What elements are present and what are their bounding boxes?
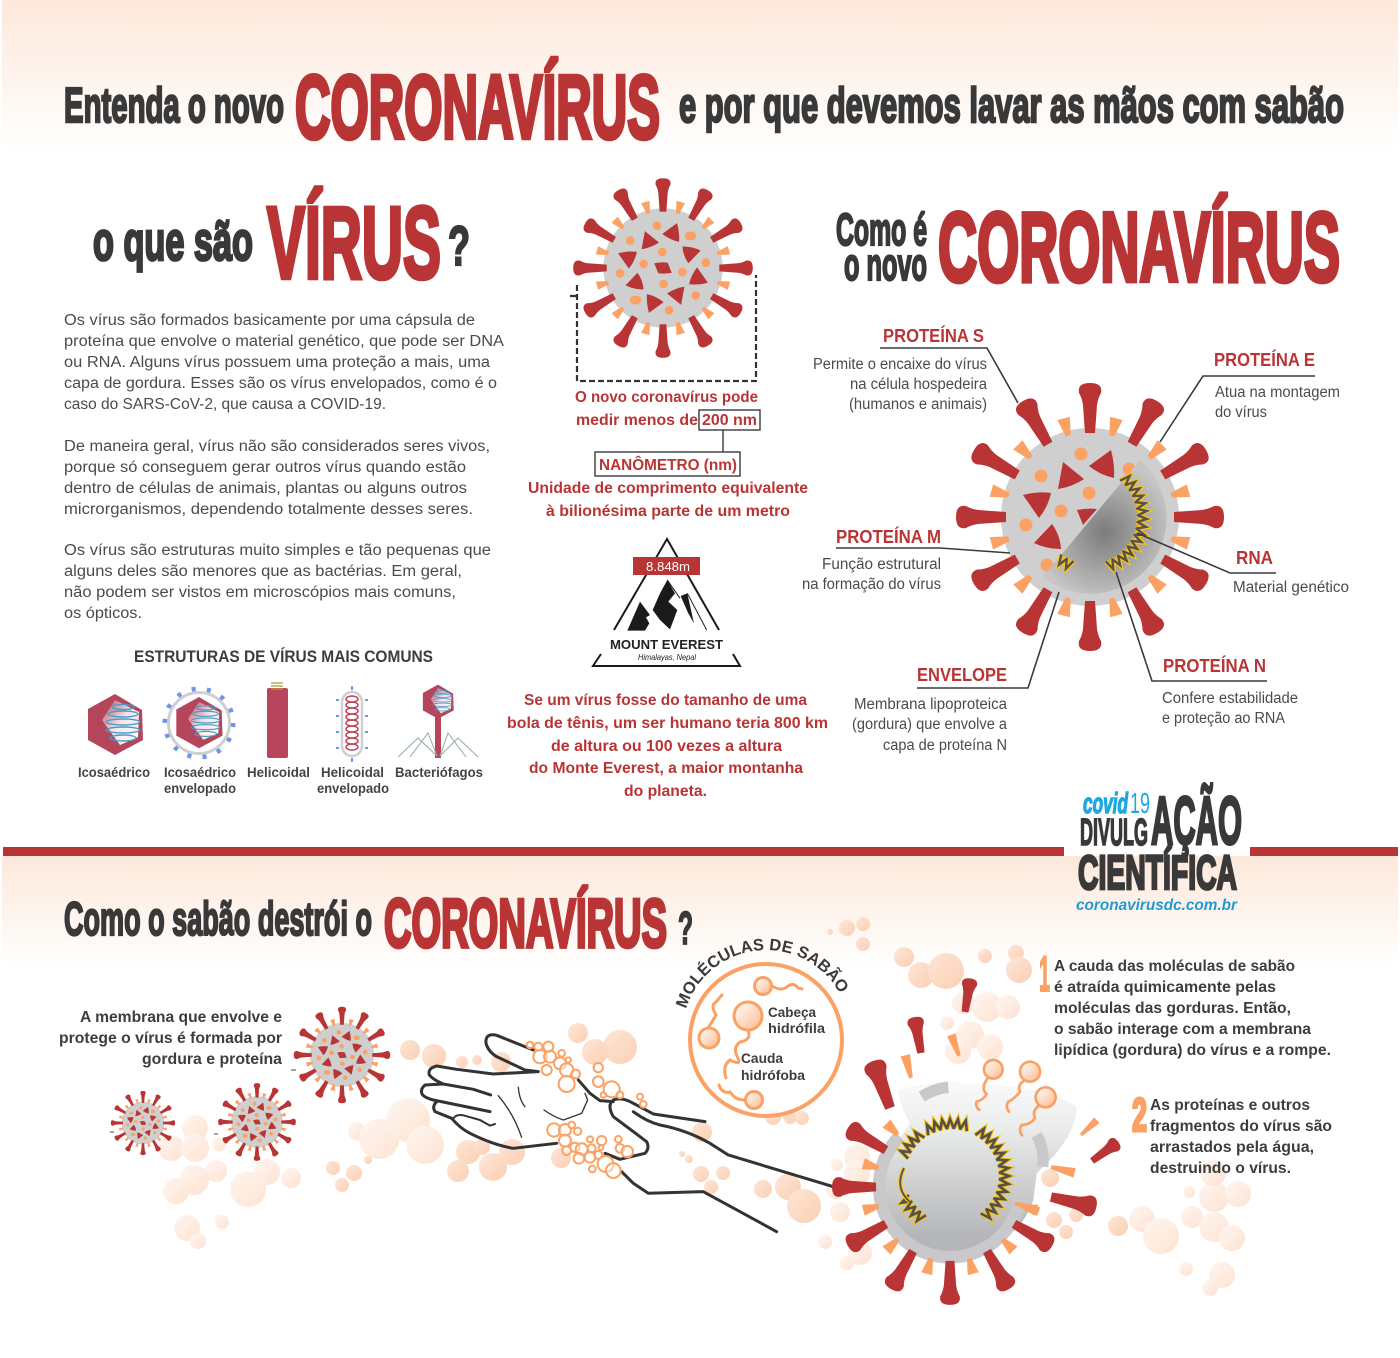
illustration: coronavirus cross section (956, 383, 1224, 651)
dashed scale box (570, 275, 756, 381)
soap foam on wrist (527, 1042, 647, 1178)
icon: bacteriophage (398, 685, 478, 758)
labels: structure names: Icosaédrico (164, 765, 236, 780)
text block: o que são vírus: capa de gordura. Esses são os vírus envelopados, como é o (64, 375, 497, 392)
heading: como o sabão destrói o coronavírus: ? (678, 902, 693, 954)
step 2: destruindo o vírus. (1150, 1160, 1291, 1177)
text: tennis ball comparison: Se um vírus fosse do tamanho de uma (524, 692, 807, 709)
callout: Proteína N: e proteção ao RNA (1162, 710, 1286, 727)
diagram: soap molecules (676, 938, 848, 1118)
text: membrane: A membrana que envolve e (80, 1009, 282, 1026)
labels: structure names: Helicoidal (247, 765, 310, 780)
panel: virus structures (78, 683, 483, 796)
soap bubbles background (158, 917, 1251, 1296)
text: size of the virus: NANÔMETRO (nm) (599, 456, 737, 474)
RNA strands (899, 1119, 1009, 1223)
diagram: soap molecules: hidrófila (768, 1020, 825, 1036)
text: size of the virus (528, 389, 808, 520)
diagram: soap molecules: hidrófoba (741, 1067, 805, 1083)
heading: como o sabão destrói o coronavírus: Como o sabão destrói o (64, 892, 372, 945)
attached spikes (832, 1119, 1057, 1305)
text: tennis ball comparison: de altura ou 100 vezes a altura (551, 738, 782, 755)
labels: structure names: envelopado (317, 781, 389, 796)
text: size of the virus: à bilionésima parte de um metro (546, 503, 790, 520)
text: size of the virus: medir menos de (576, 412, 698, 429)
diagram: coronavirus anatomy (802, 325, 1349, 754)
heading: como o sabão destrói o coronavírus: CORONAVÍRUS (384, 885, 667, 962)
logo: Covid19 Divulgação Científica: 19 (1130, 788, 1150, 820)
heading: estruturas de vírus: ESTRUTURAS DE VÍRUS MAIS COMUNS (134, 647, 433, 666)
callout: Proteína N: PROTEÍNA N (1163, 655, 1266, 676)
step 1: A cauda das moléculas de sabão (1054, 958, 1295, 975)
virus body fading (879, 1082, 1077, 1257)
text block: o que são vírus: proteína que envolve o material genético, que pode ser DNA (64, 333, 505, 350)
main title: CORONAVÍRUS (295, 57, 660, 158)
illustration: washing hands (421, 1035, 833, 1232)
callout: Proteína E: PROTEÍNA E (1214, 349, 1315, 370)
callout: Proteína E: do vírus (1215, 404, 1267, 421)
step 1: lipídica (gordura) do vírus e a rompe. (1054, 1042, 1331, 1059)
callout: Envelope: Membrana lipoproteica (854, 696, 1007, 713)
callout: Envelope: capa de proteína N (883, 737, 1007, 754)
soap molecules on virus (976, 1060, 1056, 1135)
callout: Proteína E (1160, 349, 1340, 442)
callout: Proteína N (1116, 572, 1298, 727)
icon: Mount Everest: 8.848m (646, 559, 690, 574)
icon: Mount Everest (593, 539, 740, 666)
icon: helical virus (267, 683, 288, 758)
labels: structure names: envelopado (164, 781, 236, 796)
text: size of the virus: 200 nm (702, 412, 757, 429)
detached spikes (862, 977, 1123, 1218)
text: membrane: protege o vírus é formada por (59, 1030, 282, 1047)
labels: structure names (78, 765, 483, 796)
callout: Proteína S: na célula hospedeira (850, 376, 987, 393)
icon: Mount Everest: Himalayas, Nepal (638, 652, 697, 662)
logo: Covid19 Divulgação Científica (1076, 783, 1242, 914)
text: size of the virus: O novo coronavírus pode (575, 389, 758, 406)
callout: Proteína S: PROTEÍNA S (883, 325, 984, 346)
text block: o que são vírus: alguns deles são menores que as bactérias. Em geral, (64, 563, 462, 580)
heading: o que são vírus: o que são (93, 210, 253, 272)
step 1: moléculas das gorduras. Então, (1054, 1000, 1291, 1017)
step 1: 1 (1039, 946, 1050, 1002)
step 1: é atraída quimicamente pelas (1054, 979, 1276, 996)
icon: Mount Everest: MOUNT EVEREST (610, 637, 723, 652)
callout: Proteína N: Confere estabilidade (1162, 690, 1298, 707)
icon: enveloped helical virus (336, 686, 368, 762)
step 1 (1039, 946, 1331, 1059)
callout: Envelope (852, 592, 1059, 754)
main title (64, 57, 1344, 158)
heading: como é o novo coronavírus: o novo (844, 239, 927, 290)
text block: o que são vírus: porque só conseguem gerar outros vírus quando estão (64, 459, 466, 476)
text block: o que são vírus: Os vírus são estruturas muito simples e tão pequenas que (64, 542, 491, 559)
step 2: As proteínas e outros (1150, 1097, 1310, 1114)
text block: o que são vírus (64, 312, 505, 622)
text block: o que são vírus: os ópticos. (64, 605, 142, 622)
step 2: arrastados pela água, (1150, 1139, 1314, 1156)
callout: RNA (1137, 533, 1349, 596)
labels: structure names: Bacteriófagos (395, 765, 483, 780)
diagram: soap molecules: Cauda (741, 1050, 783, 1066)
logo: Covid19 Divulgação Científica: CIENTÍFICA (1078, 846, 1237, 900)
callout: Proteína E: Atua na montagem (1215, 384, 1340, 401)
icon: coronavirus (573, 178, 753, 358)
text block: o que são vírus: Os vírus são formados basicamente por uma cápsula de (64, 312, 475, 329)
text block: o que são vírus: ou RNA. Alguns vírus possuem uma proteção a mais, uma (64, 354, 490, 371)
heading: o que são vírus: ? (448, 214, 470, 277)
step 1: o sabão interage com a membrana (1054, 1021, 1311, 1038)
text: tennis ball comparison: bola de tênis, um ser humano teria 800 km (507, 715, 828, 732)
text block: o que são vírus: não podem ser vistos em microscópios mais comuns, (64, 584, 456, 601)
text: tennis ball comparison: do Monte Everest, a maior montanha (529, 760, 803, 777)
labels: structure names: Icosaédrico (78, 765, 150, 780)
panel: scale of the virus (507, 178, 828, 800)
text: membrane: gordura e proteína (142, 1051, 282, 1068)
text block: o que são vírus: De maneira geral, vírus não são considerados seres vivos, (64, 438, 490, 455)
step 2: fragmentos do vírus são (1150, 1118, 1332, 1135)
labels: structure names: Helicoidal (321, 765, 384, 780)
callout: Envelope: (gordura) que envolve a (852, 716, 1007, 733)
icon: enveloped icosahedral virus (165, 689, 233, 757)
text: tennis ball comparison: do planeta. (624, 783, 707, 800)
text: membrane (59, 1009, 282, 1068)
divider bar (3, 847, 1398, 856)
logo: Covid19 Divulgação Científica: coronavirusdc.com.br (1076, 897, 1238, 914)
text block: o que são vírus: dentro de células de animais, plantas ou alguns outros (64, 480, 467, 497)
callout: Proteína S: (humanos e animais) (849, 396, 987, 413)
main title: Entenda o novo (64, 79, 284, 133)
icons: three small coronaviruses (110, 1007, 390, 1161)
illustration: coronavirus destroyed by soap (832, 977, 1123, 1305)
heading: o que são vírus (93, 186, 470, 300)
logo: Covid19 Divulgação Científica: covid (1083, 788, 1129, 820)
callout: Proteína M: Função estrutural (822, 556, 941, 573)
text: AÇÃO (1151, 783, 1242, 859)
callout: Proteína M: PROTEÍNA M (836, 526, 941, 547)
heading: como é o novo coronavírus: Como é (836, 204, 927, 255)
text block: o que são vírus: microrganismos, dependendo totalmente desses seres. (64, 501, 473, 518)
callout: RNA: Material genético (1233, 579, 1349, 596)
logo: Covid19 Divulgação Científica: DIVULG (1080, 812, 1148, 854)
text: tennis ball comparison (507, 692, 828, 800)
callout: Proteína M: na formação do vírus (802, 576, 941, 593)
icon: icosahedral virus (88, 694, 143, 755)
callout: Envelope: ENVELOPE (917, 664, 1007, 685)
diagram: soap molecules: Cabeça (768, 1004, 816, 1020)
step 2 (1132, 1088, 1332, 1177)
text block: o que são vírus: caso do SARS-CoV-2, que causa a COVID-19. (64, 396, 386, 413)
diagram: soap molecules: MOLÉCULAS DE SABÃO (676, 938, 848, 1008)
heading: o que são vírus: VÍRUS (267, 186, 441, 300)
heading: como o sabão destrói o coronavírus (64, 885, 693, 962)
callout: Proteína M (802, 526, 1010, 593)
callout: Proteína S (813, 325, 1018, 413)
text: size of the virus: Unidade de comprimento equivalente (528, 480, 808, 497)
callout: RNA: RNA (1236, 547, 1273, 568)
callout: Proteína S: Permite o encaixe do vírus (813, 356, 987, 373)
step 2: 2 (1132, 1088, 1147, 1141)
